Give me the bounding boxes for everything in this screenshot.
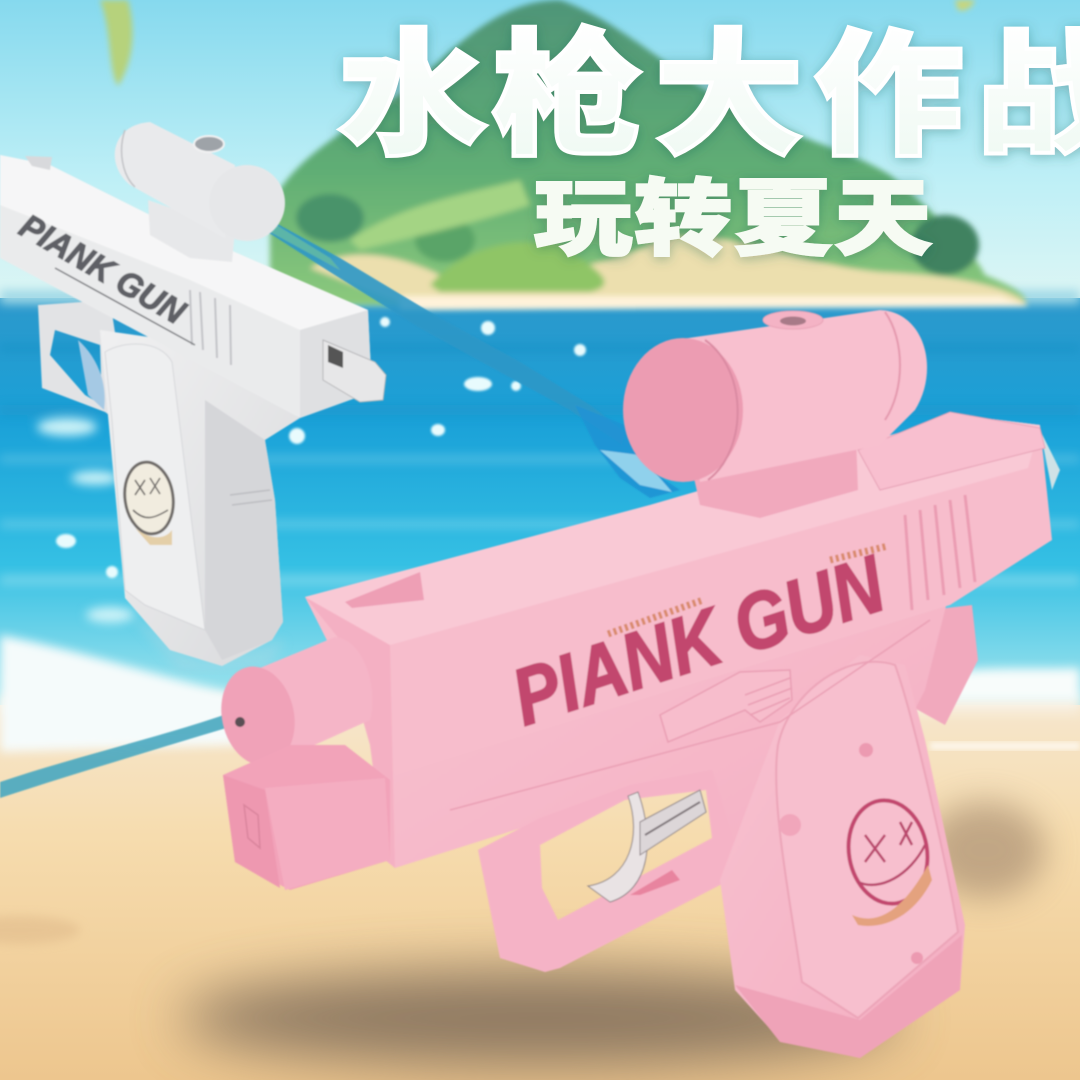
pink gun: trigger guard xyxy=(478,770,745,972)
subtitle: 天 xyxy=(834,173,932,266)
title: 水 xyxy=(338,21,488,172)
white gun: barrel nozzle xyxy=(323,340,386,402)
island xyxy=(270,0,1028,310)
background: sky xyxy=(0,0,1080,320)
subtitle: 夏 xyxy=(734,173,832,266)
white gun: frame and trigger guard xyxy=(38,300,130,430)
pink gun: rear hammer xyxy=(900,605,978,725)
title xyxy=(338,21,1080,172)
pink gun right shadow xyxy=(925,802,1045,898)
pink gun: slide stop lever xyxy=(660,670,792,742)
white water gun xyxy=(0,122,386,672)
title: 大 xyxy=(654,21,804,172)
pink gun: lower box xyxy=(223,745,390,890)
pink gun: logo PIANK GUN: PIANK GUN xyxy=(502,538,896,742)
pink gun: trigger and piston xyxy=(588,790,706,902)
pink water gun xyxy=(212,310,1060,1058)
white gun: scope xyxy=(148,200,235,262)
white gun: smiley badge xyxy=(120,459,178,545)
water jet: white gun xyxy=(252,210,680,498)
white gun: slide xyxy=(0,155,372,418)
white gun: logo PIANK GUN: PIANK GUN xyxy=(13,207,193,333)
pink gun ground shadow xyxy=(180,970,900,1066)
subtitle: 转 xyxy=(634,173,732,266)
white gun: shadow xyxy=(125,610,285,672)
leaves top xyxy=(100,0,975,86)
pink gun: barrel xyxy=(212,637,372,772)
pink gun: scope xyxy=(623,310,927,518)
pink gun: top rear panel xyxy=(858,412,1045,490)
subtitle: 玩 xyxy=(534,173,632,266)
water spots on sea xyxy=(56,317,586,578)
background: sea xyxy=(0,290,1080,708)
pink gun: grip xyxy=(720,655,965,1058)
subtitle xyxy=(534,173,932,266)
pink gun: smiley badge xyxy=(841,794,935,926)
title: 作 xyxy=(814,21,964,172)
background: sea foam xyxy=(0,635,1080,752)
pink gun: frame xyxy=(385,590,950,930)
white gun: grip xyxy=(100,330,300,666)
pink gun: slide xyxy=(305,415,1052,775)
title: 枪 xyxy=(492,21,642,172)
water jet: pink gun xyxy=(0,708,246,798)
background: sand beach xyxy=(0,696,1080,1080)
